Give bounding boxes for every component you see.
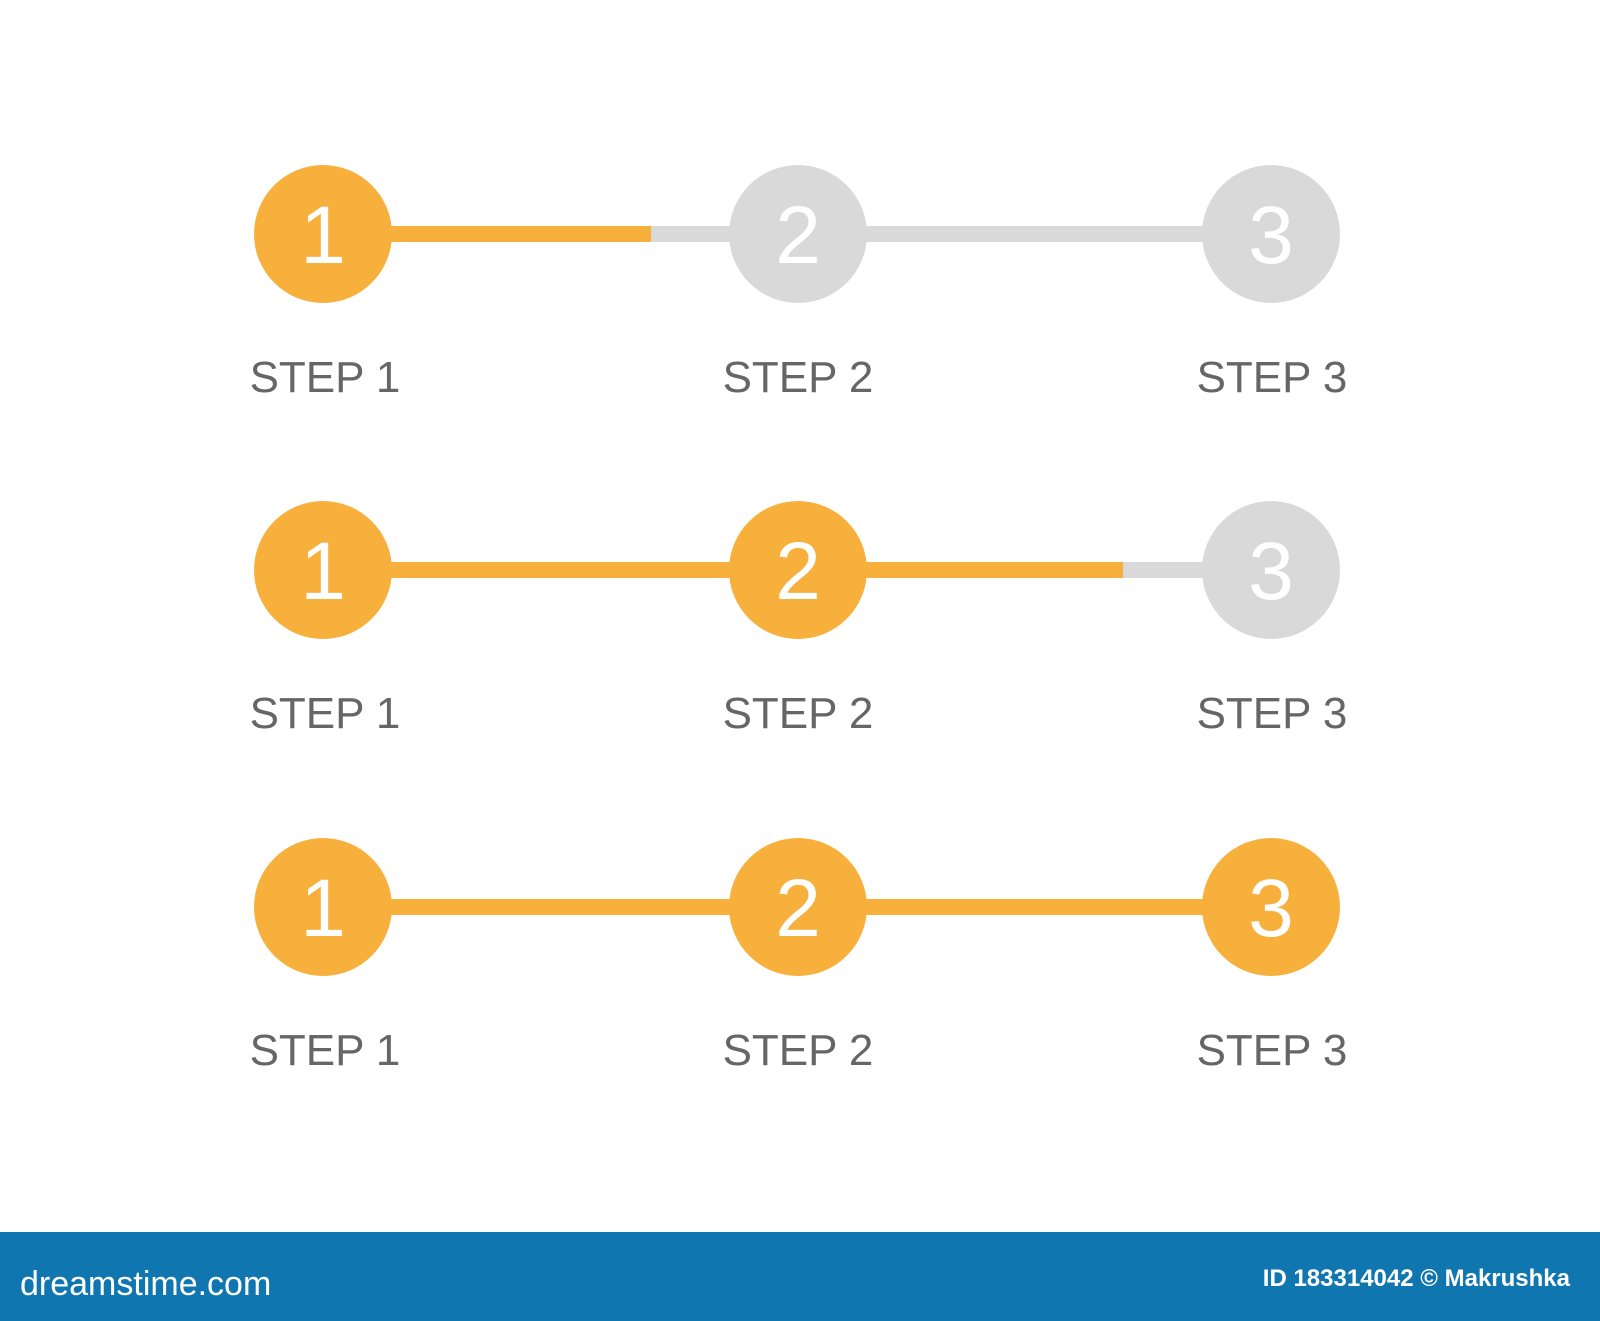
- circle 2: 2: [775, 526, 821, 617]
- circle 2: [729, 838, 867, 976]
- row 3: all complete: [250, 838, 1347, 1075]
- row 2: step 2 active: [250, 501, 1347, 738]
- labels row 2: STEP 2: [723, 689, 873, 738]
- labels row 3: STEP 1: [250, 1026, 400, 1075]
- circle 3: [1202, 501, 1340, 639]
- footer logo text: dreamstime.com: [20, 1265, 271, 1303]
- circle 2: 2: [775, 190, 821, 281]
- circle 1: 1: [300, 526, 346, 617]
- circle 1: [254, 838, 392, 976]
- labels row 2: STEP 1: [250, 689, 400, 738]
- circle 2: 2: [775, 863, 821, 954]
- circle 3: 3: [1248, 190, 1294, 281]
- labels row 3: [250, 1026, 1347, 1075]
- circle 3: 3: [1248, 863, 1294, 954]
- labels row 1: STEP 3: [1197, 353, 1347, 402]
- labels row 3: STEP 2: [723, 1026, 873, 1075]
- circle 3: 3: [1248, 526, 1294, 617]
- circle 2: [729, 501, 867, 639]
- footer id text: ID 183314042 © Makrushka: [1263, 1265, 1571, 1292]
- labels row 1: STEP 1: [250, 353, 400, 402]
- circle 2: [729, 165, 867, 303]
- circle 1: 1: [300, 863, 346, 954]
- footer band: [0, 1232, 1600, 1321]
- circle 1: 1: [300, 190, 346, 281]
- row 1: step 1 active: [250, 165, 1347, 402]
- circle 1: [254, 501, 392, 639]
- circle 3: [1202, 838, 1340, 976]
- circle 1: [254, 165, 392, 303]
- labels row 1: [250, 353, 1347, 402]
- labels row 2: STEP 3: [1197, 689, 1347, 738]
- circle 3: [1202, 165, 1340, 303]
- labels row 2: [250, 689, 1347, 738]
- labels row 1: STEP 2: [723, 353, 873, 402]
- labels row 3: STEP 3: [1197, 1026, 1347, 1075]
